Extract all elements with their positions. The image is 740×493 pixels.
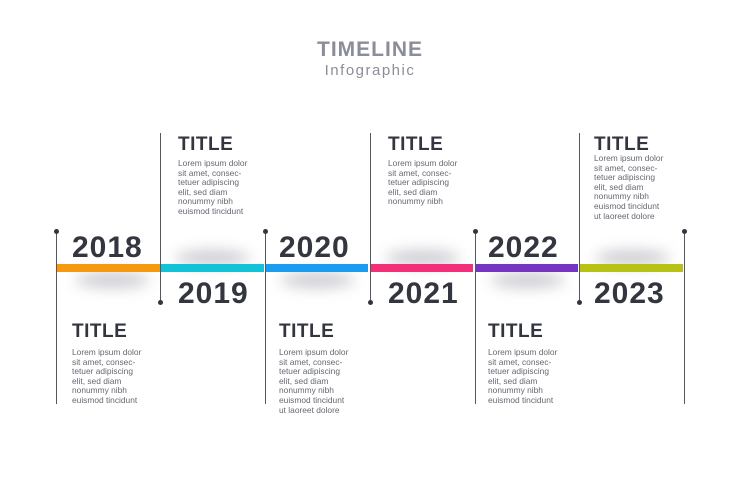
item 2021: sit amet, consec- [388, 168, 451, 178]
item 2020: sit amet, consec- [279, 357, 342, 367]
item 2020: euismod tincidunt [279, 395, 344, 405]
item 2020: elit, sed diam [279, 376, 328, 386]
item 2019: elit, sed diam [178, 187, 227, 197]
item 2021: nonummy nibh [388, 196, 443, 206]
item 2021: 2021 [388, 277, 459, 310]
item 2023: TITLE [594, 134, 649, 155]
title: TIMELINE [317, 38, 423, 61]
item 2022: nonummy nibh [488, 385, 543, 395]
item 2018: sit amet, consec- [72, 357, 135, 367]
item 2019: tetuer adipiscing [178, 177, 239, 187]
item 2023: sit amet, consec- [594, 163, 657, 173]
item 2022: tetuer adipiscing [488, 366, 549, 376]
item 2021: tetuer adipiscing [388, 177, 449, 187]
item 2019 [178, 134, 249, 310]
item 2022: TITLE [488, 321, 543, 342]
item 2020: Lorem ipsum dolor [279, 347, 348, 357]
item 2021: Lorem ipsum dolor [388, 158, 457, 168]
item 2023: euismod tincidunt [594, 201, 659, 211]
item 2021: TITLE [388, 134, 443, 155]
item 2022: Lorem ipsum dolor [488, 347, 557, 357]
item 2019: TITLE [178, 134, 233, 155]
item 2020: TITLE [279, 321, 334, 342]
item 2022: sit amet, consec- [488, 357, 551, 367]
item 2022: euismod tincidunt [488, 395, 553, 405]
item 2021: elit, sed diam [388, 187, 437, 197]
item 2019: sit amet, consec- [178, 168, 241, 178]
item 2019: 2019 [178, 277, 249, 310]
item 2019: Lorem ipsum dolor [178, 158, 247, 168]
item 2020 [279, 231, 350, 415]
item 2020: tetuer adipiscing [279, 366, 340, 376]
item 2018: euismod tincidunt [72, 395, 137, 405]
item 2018: elit, sed diam [72, 376, 121, 386]
item 2019: euismod tincidunt [178, 206, 243, 216]
item 2020: nonummy nibh [279, 385, 334, 395]
item 2023: elit, sed diam [594, 182, 643, 192]
item 2018 [72, 231, 143, 405]
item 2018: Lorem ipsum dolor [72, 347, 141, 357]
item 2023: Lorem ipsum dolor [594, 153, 663, 163]
item 2018: tetuer adipiscing [72, 366, 133, 376]
item 2023: tetuer adipiscing [594, 172, 655, 182]
item 2023: 2023 [594, 277, 665, 310]
item 2022: elit, sed diam [488, 376, 537, 386]
item 2019: nonummy nibh [178, 196, 233, 206]
subtitle: Infographic [325, 62, 415, 79]
item 2022 [488, 231, 559, 405]
item 2018: TITLE [72, 321, 127, 342]
item 2018: nonummy nibh [72, 385, 127, 395]
item 2020: ut laoreet dolore [279, 405, 340, 415]
timeline bar [57, 264, 683, 272]
item 2022: 2022 [488, 231, 559, 264]
item 2018: 2018 [72, 231, 143, 264]
item 2023: nonummy nibh [594, 191, 649, 201]
item 2021 [388, 134, 459, 310]
item 2023: ut laoreet dolore [594, 211, 655, 221]
item 2023 [594, 134, 665, 310]
item 2020: 2020 [279, 231, 350, 264]
